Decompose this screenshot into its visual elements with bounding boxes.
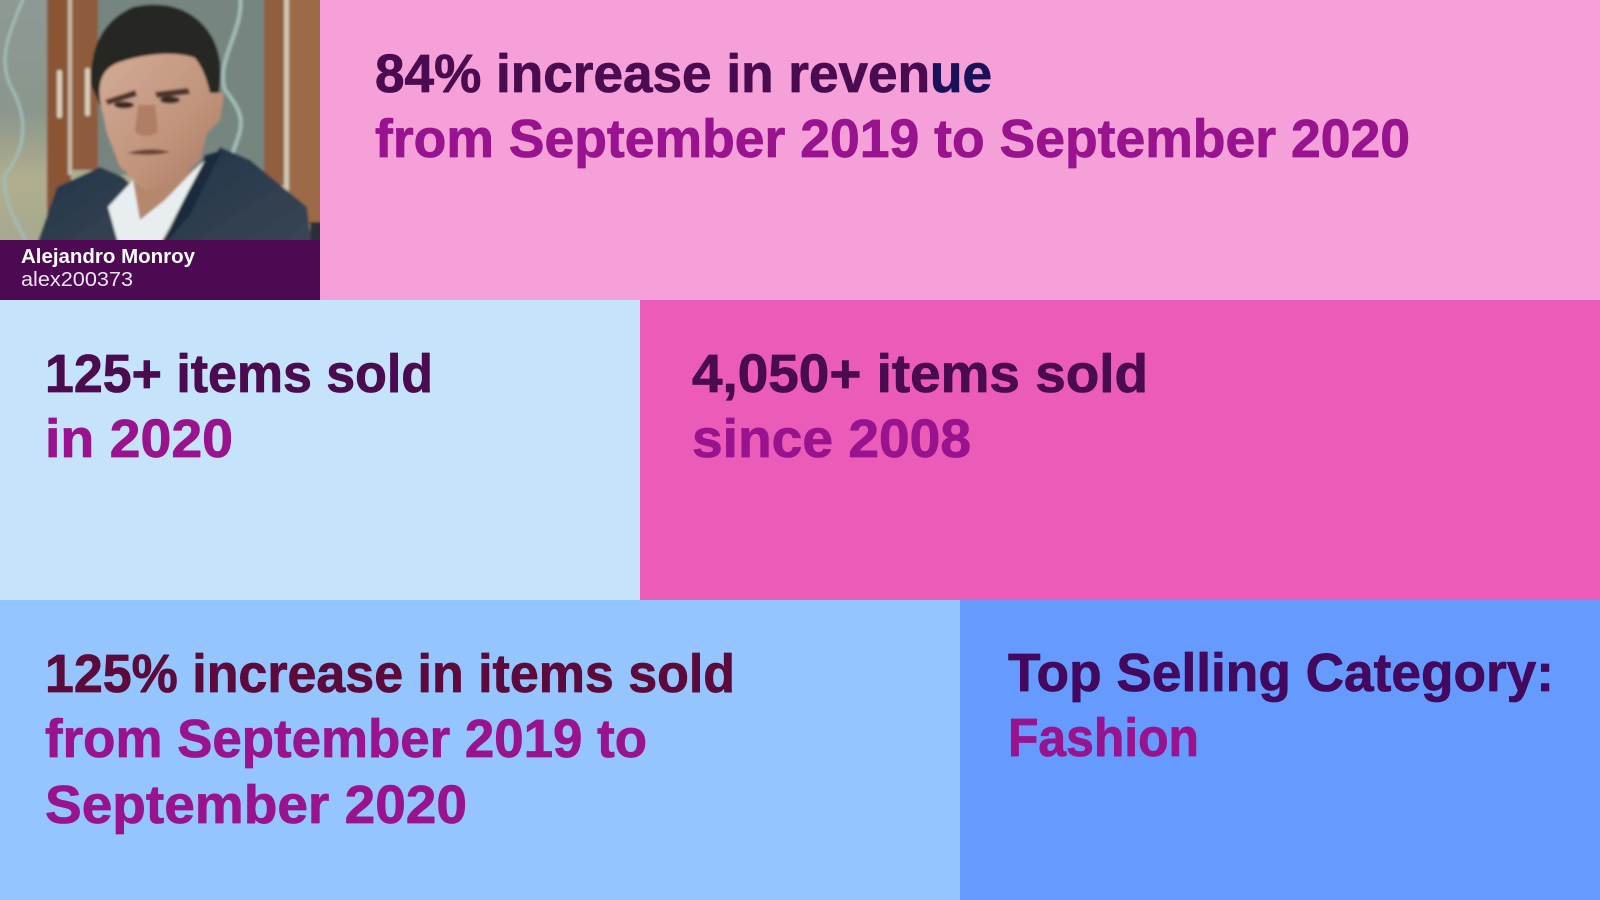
photo of seller [0, 0, 320, 240]
caption bar [0, 240, 320, 300]
increase period: September 2020 [45, 775, 467, 835]
panel: revenue increase [320, 0, 1600, 300]
panel: items sold increase [0, 600, 960, 900]
panel: items sold in 2020 [0, 300, 640, 600]
revenue headline: 84% increase in revenue [375, 44, 992, 104]
increase period: from September 2019 to [45, 709, 647, 769]
increase headline: 125% increase in items sold [45, 644, 735, 704]
panel: items sold since 2008 [640, 300, 1600, 600]
category value: Fashion [1008, 708, 1199, 768]
category heading: Top Selling Category: [1008, 643, 1554, 703]
seller name: Alejandro Monroy [21, 246, 196, 268]
panel: portrait [0, 0, 330, 300]
items sold headline: 125+ items sold [45, 344, 433, 404]
increase period [45, 709, 647, 835]
items sold period: in 2020 [45, 409, 233, 469]
seller handle: alex200373 [21, 269, 133, 291]
revenue period: from September 2019 to September 2020 [375, 109, 1410, 169]
lifetime items headline: 4,050+ items sold [692, 344, 1148, 404]
panel: top category [960, 600, 1600, 900]
lifetime items period: since 2008 [692, 409, 971, 469]
